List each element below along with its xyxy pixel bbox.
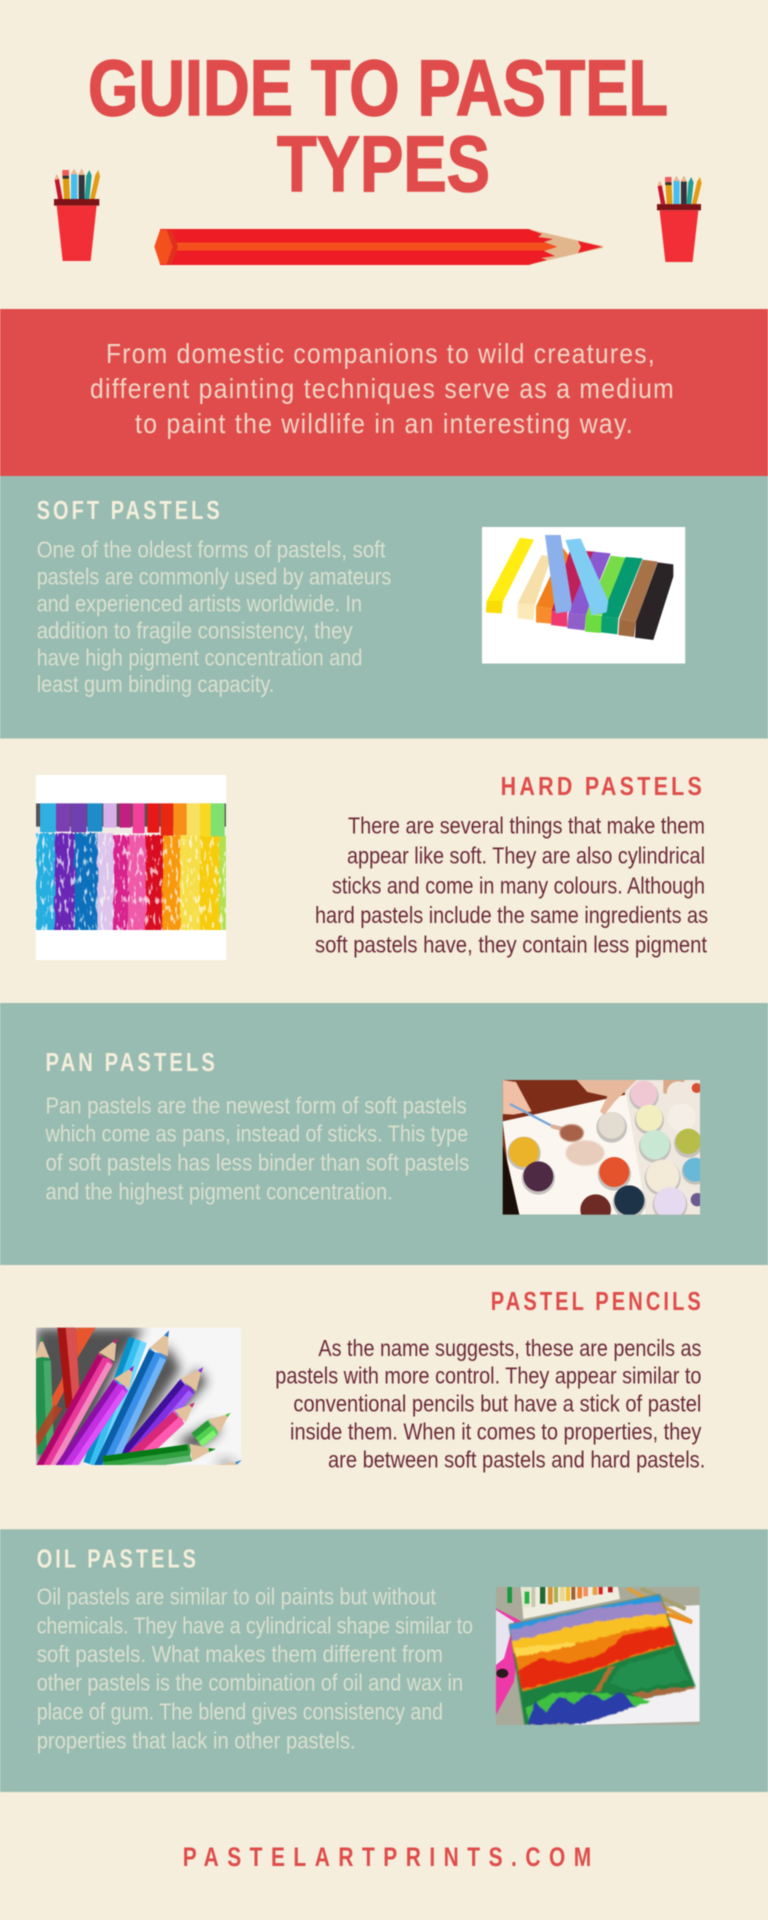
- text: soft pastels: and experienced artists worldwide. In: [37, 590, 362, 616]
- panel: hard pastels: [36, 771, 708, 960]
- text: pastel pencils: pastels with more control. They appear similar to: [275, 1362, 701, 1388]
- image: coloured pencils: [35, 1326, 242, 1466]
- text: pastel pencils: inside them. When it comes to properties, they: [290, 1418, 702, 1444]
- orange back pencil: [36, 1328, 96, 1442]
- indigo pencil: [122, 1366, 204, 1454]
- text: oil pastels: [37, 1583, 473, 1753]
- image: pastel colour swatches: [36, 775, 227, 960]
- text: pan pastels: and the highest pigment concentration.: [46, 1178, 393, 1204]
- panel: soft pastels: [0, 476, 768, 738]
- text: soft pastels: addition to fragile consistency, they: [37, 617, 353, 643]
- painting: [509, 1594, 696, 1725]
- text: soft pastels: One of the oldest forms of pastels, soft: [37, 537, 386, 563]
- text: pastel pencils: As the name suggests, these are pencils as: [318, 1335, 701, 1361]
- title: [88, 43, 668, 208]
- text: hard pastels: sticks and come in many colours. Although: [332, 872, 705, 898]
- text: pastel pencils: conventional pencils but have a stick of pastel: [293, 1391, 701, 1417]
- panel: pan pastels: [0, 1003, 768, 1265]
- text: oil pastels: soft pastels. What makes them different from: [37, 1641, 443, 1667]
- violet pencil: [56, 1365, 134, 1466]
- orange lower streak: [36, 1405, 62, 1448]
- text: hard pastels: appear like soft. They are also cylindrical: [347, 842, 705, 868]
- red back pencil: [56, 1327, 76, 1410]
- text: pastel pencils: are between soft pastels and hard pastels.: [328, 1446, 705, 1472]
- icon: large red pencil: [154, 229, 603, 265]
- blue pencil: [94, 1330, 170, 1466]
- text: pan pastels: of soft pastels has less binder than soft pastels: [46, 1150, 469, 1176]
- magenta pencil: [36, 1338, 118, 1466]
- heading: pastel pencils: PASTEL PENCILS: [491, 1286, 704, 1316]
- light green pencil: [191, 1412, 231, 1447]
- intro text: to paint the wildlife in an interesting way.: [135, 408, 634, 439]
- footer url: PASTELARTPRINTS.COM: [183, 1842, 600, 1872]
- text: oil pastels: properties that lack in other pastels.: [37, 1727, 356, 1753]
- intro text: From domestic companions to wild creatures,: [106, 338, 656, 369]
- text: pan pastels: which come as pans, instead of sticks. This type: [45, 1121, 468, 1147]
- dark green pencil: [102, 1444, 216, 1466]
- green left pencil: [33, 1334, 54, 1455]
- image: chalk pastel sticks: [482, 527, 685, 664]
- heading: hard pastels: HARD PASTELS: [501, 771, 705, 801]
- text: oil pastels: other pastels is the combination of oil and wax in: [37, 1670, 463, 1696]
- image: pan pastels palette: [503, 1080, 708, 1225]
- icon: right pencil cup: [657, 176, 702, 262]
- text: hard pastels: soft pastels have, they contain less pigment: [315, 932, 707, 958]
- text: pan pastels: [45, 1092, 469, 1204]
- text: soft pastels: pastels are commonly used by amateurs: [37, 563, 391, 589]
- text: oil pastels: Oil pastels are similar to oil paints but without: [37, 1583, 436, 1609]
- small blue pencil tip: [217, 1460, 242, 1465]
- text: hard pastels: There are several things that make them: [348, 812, 705, 838]
- image: oil pastel landscape: [496, 1587, 700, 1725]
- text: pan pastels: Pan pastels are the newest form of soft pastels: [46, 1092, 467, 1118]
- pink pencil: [129, 1402, 195, 1453]
- banner: intro: [0, 309, 768, 476]
- intro text: different painting techniques serve as a medium: [90, 373, 675, 404]
- icon: left pencil cup: [54, 169, 100, 261]
- heading: oil pastels: OIL PASTELS: [37, 1543, 199, 1573]
- text: soft pastels: least gum binding capacity.: [37, 671, 274, 697]
- text: hard pastels: hard pastels include the same ingredients as: [315, 902, 708, 928]
- text: soft pastels: have high pigment concentration and: [37, 644, 362, 670]
- panel: oil pastels: [0, 1529, 768, 1792]
- intro text: [90, 338, 675, 439]
- panel: pastel pencils: [35, 1291, 704, 1474]
- text: oil pastels: chemicals. They have a cylindrical shape similar to: [37, 1612, 473, 1638]
- text: oil pastels: place of gum. The blend gives consistency and: [37, 1698, 443, 1724]
- text: hard pastels: [315, 812, 708, 958]
- title: TYPES: [277, 119, 490, 208]
- text: soft pastels: [37, 537, 391, 697]
- heading: soft pastels: SOFT PASTELS: [37, 495, 223, 525]
- cyan pencil: [83, 1337, 147, 1468]
- heading: pan pastels: PAN PASTELS: [46, 1047, 218, 1077]
- text: pastel pencils: [275, 1335, 705, 1472]
